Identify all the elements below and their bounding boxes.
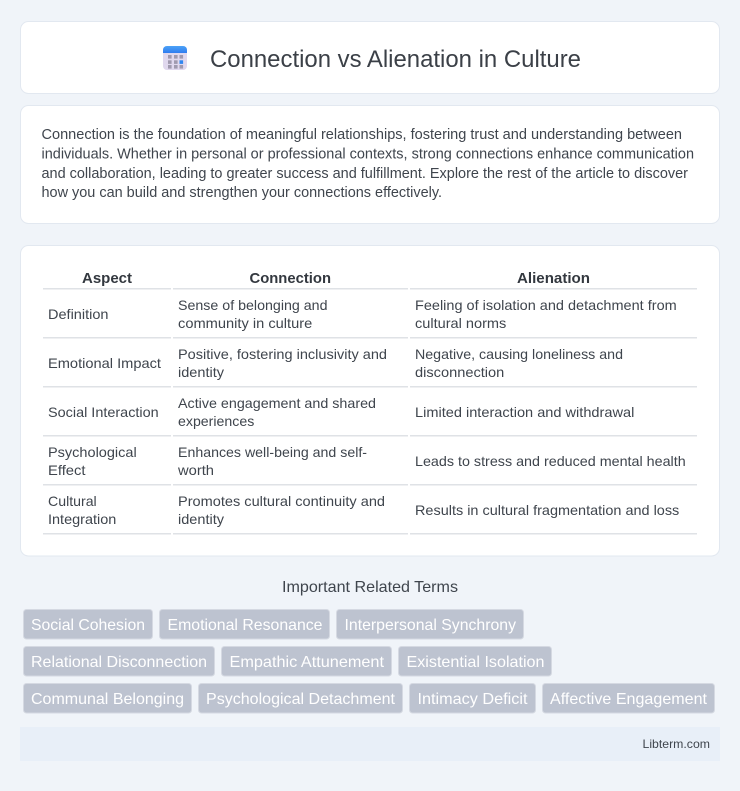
row: psychological effect: worth: [177, 462, 214, 478]
intro text: and collaboration, leading to greater success and fulfillment. Explore the rest of the article to discover: [42, 166, 688, 182]
row: emotional impact: identity: [178, 364, 224, 380]
table header: Alienation: [517, 270, 590, 287]
row: definition: Feeling of isolation and detachment from: [415, 297, 677, 313]
row: psychological effect: Leads to stress and reduced mental health: [415, 453, 686, 469]
row: psychological effect: Effect: [48, 462, 86, 478]
header panel: [20, 22, 720, 94]
related terms tags: Existential Isolation: [406, 654, 544, 671]
footer source: Libterm.com: [642, 737, 710, 751]
title: Connection vs Alienation in Culture: [210, 46, 581, 73]
row: social interaction: [48, 395, 634, 429]
row: definition: Sense of belonging and: [178, 297, 328, 313]
related terms tags: Relational Disconnection: [31, 654, 207, 671]
related terms tags: Intimacy Deficit: [418, 691, 528, 708]
row: cultural integration: Cultural: [48, 493, 97, 509]
row: emotional impact: Emotional Impact: [48, 355, 161, 371]
related terms tags: Psychological Detachment: [206, 691, 396, 708]
row: social interaction: Active engagement and shared: [178, 395, 376, 411]
row: cultural integration: identity: [178, 511, 224, 527]
intro panel: [20, 106, 720, 224]
table header: Aspect: [82, 270, 132, 287]
row: psychological effect: [48, 444, 686, 478]
row: emotional impact: [48, 346, 623, 380]
row: social interaction: Limited interaction and withdrawal: [415, 404, 634, 420]
row: social interaction: experiences: [178, 413, 254, 429]
related terms tags: Communal Belonging: [31, 691, 184, 708]
intro text: Connection is the foundation of meaningful relationships, fostering trust and understanding between: [42, 127, 682, 143]
related terms tags: [24, 610, 714, 713]
intro text: individuals. Whether in personal or professional contexts, strong connections enhance communication: [42, 146, 694, 162]
row: emotional impact: disconnection: [415, 364, 504, 380]
footer: [20, 727, 720, 761]
related terms heading: Important Related Terms: [282, 579, 458, 596]
related terms tags: Interpersonal Synchrony: [344, 617, 516, 634]
row: definition: Definition: [48, 306, 108, 322]
related terms tags: Affective Engagement: [550, 691, 708, 708]
row: cultural integration: Promotes cultural continuity and: [178, 493, 385, 509]
row: social interaction: Social Interaction: [48, 404, 159, 420]
intro text: [42, 127, 694, 201]
related terms tags: Emotional Resonance: [168, 617, 323, 634]
icon: calendar: [163, 46, 187, 70]
row: definition: [48, 297, 677, 331]
related terms tags: Empathic Attunement: [230, 654, 385, 671]
intro text: how you can build and strengthen your connections effectively.: [42, 185, 442, 201]
related terms tags: Social Cohesion: [31, 617, 145, 634]
row: cultural integration: Results in cultural fragmentation and loss: [415, 502, 679, 518]
row: cultural integration: [48, 493, 679, 527]
row: emotional impact: Positive, fostering inclusivity and: [178, 346, 387, 362]
row: psychological effect: Psychological: [48, 444, 137, 460]
table header: Connection: [250, 270, 331, 287]
row: definition: cultural norms: [415, 315, 506, 331]
table header: [82, 270, 590, 287]
row: cultural integration: Integration: [48, 511, 116, 527]
row: psychological effect: Enhances well-being and self-: [178, 444, 367, 460]
row: definition: community in culture: [178, 315, 313, 331]
row: emotional impact: Negative, causing loneliness and: [415, 346, 623, 362]
table panel: [20, 246, 720, 556]
